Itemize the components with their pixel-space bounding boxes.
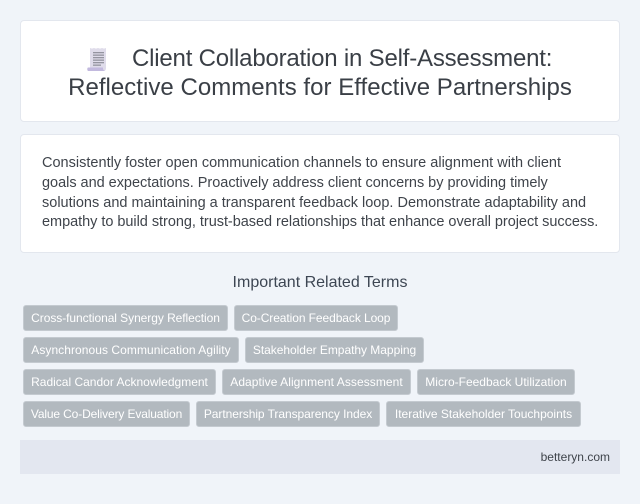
tag: Value Co-Delivery Evaluation xyxy=(31,407,182,421)
tag: Stakeholder Empathy Mapping xyxy=(253,343,416,357)
icon: document scroll xyxy=(87,48,106,71)
summary line 3: solutions and maintaining a transparent feedback loop. Demonstrate adaptability and xyxy=(42,195,586,211)
title panel xyxy=(20,20,620,122)
summary text panel xyxy=(20,134,620,253)
tag: Cross-functional Synergy Reflection xyxy=(31,311,220,325)
tag xyxy=(234,305,398,331)
tag: Adaptive Alignment Assessment xyxy=(230,375,403,389)
summary line 4: empathy to build strong, trust-based relationships that enhance overall project success. xyxy=(42,214,598,230)
tag xyxy=(222,369,411,395)
tag: Co-Creation Feedback Loop xyxy=(242,311,390,325)
footer site name: betteryn.com xyxy=(541,450,610,464)
footer bar xyxy=(20,440,620,474)
tag: Micro-Feedback Utilization xyxy=(425,375,567,389)
tag xyxy=(23,369,216,395)
tag xyxy=(196,401,380,427)
summary line 1: Consistently foster open communication channels to ensure alignment with client xyxy=(42,155,561,171)
tag xyxy=(417,369,575,395)
tag: Asynchronous Communication Agility xyxy=(31,343,231,357)
tag xyxy=(23,305,228,331)
title line 2: Reflective Comments for Effective Partnerships xyxy=(68,74,572,101)
title line 1: Client Collaboration in Self-Assessment: xyxy=(132,45,552,72)
summary line 2: goals and expectations. Proactively address client concerns by providing timely xyxy=(42,175,548,191)
tag: Partnership Transparency Index xyxy=(204,407,372,421)
tag xyxy=(23,337,239,363)
tag: Radical Candor Acknowledgment xyxy=(31,375,208,389)
tag xyxy=(23,401,190,427)
related terms heading: Important Related Terms xyxy=(233,274,407,291)
tag: Iterative Stakeholder Touchpoints xyxy=(395,407,572,421)
tag xyxy=(245,337,424,363)
tag xyxy=(386,401,581,427)
